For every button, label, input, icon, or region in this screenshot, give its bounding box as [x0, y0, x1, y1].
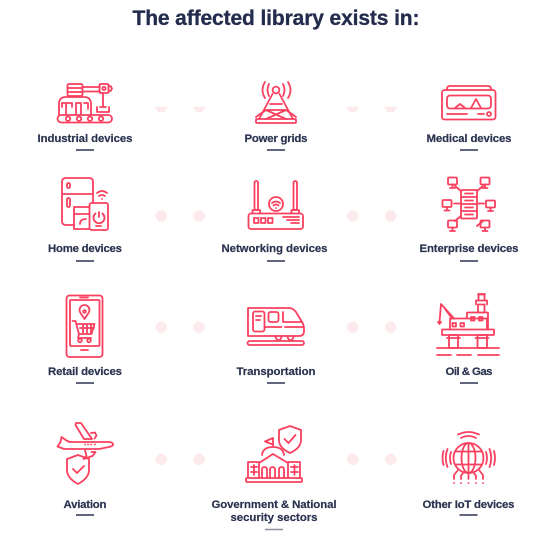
decorative connector dots	[156, 107, 397, 465]
icon: fridge, washer and phone	[62, 178, 108, 230]
label: Home devices	[48, 243, 122, 255]
underline	[460, 149, 478, 151]
panel: enterprise devices	[420, 178, 518, 261]
underline	[76, 382, 94, 384]
panel: other iot devices	[422, 432, 514, 515]
label: Government & National	[212, 499, 336, 511]
underline	[460, 514, 478, 516]
underline	[267, 149, 285, 151]
label: Other IoT devices	[422, 499, 514, 511]
second label line: security sectors	[230, 512, 318, 524]
underline	[265, 528, 283, 530]
panel: networking devices	[222, 181, 328, 261]
icon: medical monitor	[442, 86, 496, 120]
label: Transportation	[236, 366, 316, 378]
panel: government and national security sectors	[212, 426, 336, 530]
icon: server network	[442, 178, 495, 231]
icon: transmission tower	[256, 82, 296, 123]
label: Power grids	[244, 133, 308, 145]
panel: power grids	[244, 82, 308, 150]
panel: oil and gas	[437, 294, 499, 383]
underline	[267, 260, 285, 262]
label: Enterprise devices	[420, 243, 518, 255]
label: Industrial devices	[38, 133, 132, 145]
panel: industrial devices	[38, 84, 132, 150]
icon: capitol building with shield	[246, 426, 302, 482]
icon: wifi router	[248, 181, 303, 229]
label: Medical devices	[426, 133, 512, 145]
underline	[76, 514, 94, 516]
icon: tablet with shopping cart	[66, 296, 102, 357]
panel: retail devices	[48, 296, 122, 383]
underline	[76, 260, 94, 262]
icon: robot arm on tracks	[58, 84, 112, 122]
icon: connected globe	[442, 432, 495, 483]
icon: offshore oil platform	[437, 294, 499, 355]
icon: airplane with shield	[58, 423, 113, 484]
panel: aviation	[58, 423, 113, 515]
panel: home devices	[48, 178, 122, 261]
underline	[267, 382, 285, 384]
label: Retail devices	[48, 366, 122, 378]
icon: high speed train	[248, 308, 304, 345]
label: Aviation	[64, 499, 107, 511]
underline	[460, 382, 478, 384]
label: Networking devices	[222, 243, 328, 255]
panel: medical devices	[426, 86, 512, 150]
underline	[460, 260, 478, 262]
title: The affected library exists in:	[132, 7, 420, 30]
label: Oil & Gas	[446, 366, 492, 378]
panel: transportation	[236, 308, 316, 383]
underline	[76, 149, 94, 151]
